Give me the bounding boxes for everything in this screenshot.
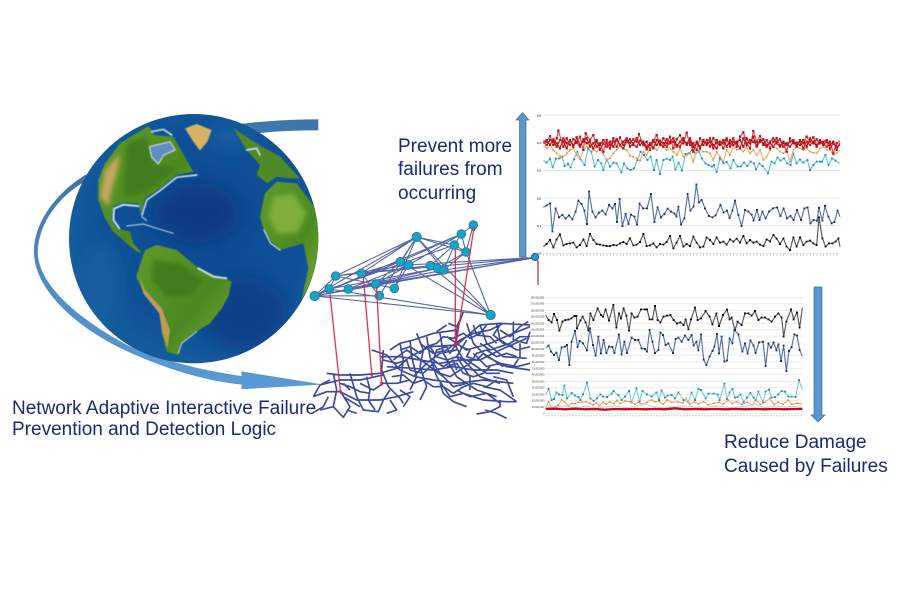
chart y-axis labels: 140,000,000 xyxy=(531,322,545,325)
chart y-axis labels: 30,000,000 xyxy=(532,393,545,396)
text: reduce damage: Caused by Failures xyxy=(724,456,888,477)
land: Greenland xyxy=(185,124,212,151)
arrow: downward blue arrow xyxy=(811,287,825,422)
arrow: upward blue arrow xyxy=(516,112,529,257)
chart y-axis labels: 0,4 xyxy=(537,141,541,145)
chart y-axis labels: 0,0 xyxy=(537,252,541,256)
series: black xyxy=(546,305,802,337)
land: Western North America tan xyxy=(100,153,120,207)
top chart: failure rate series xyxy=(537,113,840,256)
chart plotted series xyxy=(546,305,802,410)
chart y-axis labels: 0,1 xyxy=(537,224,541,228)
chart gridlines xyxy=(543,115,840,253)
chart y-axis labels: 130,000,000 xyxy=(531,329,545,332)
swoosh: left arc with arrowhead xyxy=(34,175,321,389)
chart y-axis labels: 0,2 xyxy=(537,196,541,200)
land: Hudson Bay xyxy=(149,142,175,164)
globe xyxy=(69,114,320,363)
land: Andes tan xyxy=(140,277,170,348)
text: network adaptive logic: Network Adaptive Interactive Failure xyxy=(12,398,316,419)
series: red two xyxy=(543,137,840,152)
text: prevent more failures: failures from xyxy=(398,159,503,180)
text: network adaptive logic: Prevention and Detection Logic xyxy=(12,419,276,440)
series: cyan xyxy=(546,380,802,402)
series: navy blue xyxy=(546,328,802,371)
connector: network node to chart xyxy=(532,254,538,285)
network graph and map xyxy=(310,221,537,418)
red link between charts xyxy=(537,260,539,285)
ocean shading xyxy=(80,123,287,350)
land: dark forest patches xyxy=(123,137,177,197)
chart y-axis labels: 0,3 xyxy=(537,169,541,173)
land: North America xyxy=(98,126,193,253)
series: navy blue xyxy=(543,184,840,231)
chart y-axis labels: 120,000,000 xyxy=(531,335,545,338)
text: reduce damage: Reduce Damage xyxy=(724,432,867,453)
chart y-axis labels: 110,000,000 xyxy=(531,342,545,345)
series: red three xyxy=(543,137,840,150)
chart y-axis labels: 50,000,000 xyxy=(532,380,545,383)
chart y-axis labels: 80,000,000 xyxy=(532,361,545,364)
swoosh arrow around globe xyxy=(34,119,321,389)
network: graph edges xyxy=(315,225,537,315)
land: Africa xyxy=(260,182,320,300)
network: nodes xyxy=(310,221,495,320)
series: pale blue xyxy=(546,404,802,408)
series: red one xyxy=(543,131,840,153)
chart y-axis labels: 100,000,000 xyxy=(531,348,545,351)
series: orange xyxy=(543,145,840,162)
text: prevent more failures: occurring xyxy=(398,183,476,204)
chart y-axis labels: 0 xyxy=(543,413,545,416)
swoosh: top right band xyxy=(240,119,318,133)
map: road network xyxy=(313,312,530,418)
land: Amazon dark area xyxy=(152,260,203,297)
chart y-axis labels: 160,000,000 xyxy=(531,309,545,312)
chart y-axis labels: 180,000,000 xyxy=(531,296,545,299)
chart y-axis labels: 60,000,000 xyxy=(532,374,545,377)
series: black xyxy=(543,217,840,250)
node at chart edge xyxy=(532,254,538,260)
chart y-axis labels: 0,5 xyxy=(537,113,541,117)
chart y-axis labels xyxy=(531,296,545,416)
chart y-axis labels: 90,000,000 xyxy=(532,354,545,357)
chart plotted series xyxy=(543,131,840,250)
chart y-axis labels: 20,000,000 xyxy=(532,400,545,403)
bottom chart: damage series xyxy=(531,296,802,416)
chart x-axis ticks xyxy=(546,414,802,418)
chart y-axis labels: 150,000,000 xyxy=(531,316,545,319)
series: red band xyxy=(546,408,802,410)
land: South America xyxy=(136,245,232,355)
land: Africa light patches xyxy=(268,193,307,233)
text: prevent more failures: Prevent more xyxy=(398,136,512,157)
series: cyan xyxy=(543,148,840,174)
chart y-axis labels: 70,000,000 xyxy=(532,367,545,370)
land: Europe xyxy=(233,128,300,183)
chart gridlines xyxy=(546,297,802,414)
land: coastal shelf highlights xyxy=(113,129,280,353)
chart y-axis labels xyxy=(537,113,541,256)
chart y-axis labels: 40,000,000 xyxy=(532,387,545,390)
red mapping arrows between graph and map xyxy=(330,227,474,394)
chart y-axis labels: 10,000,000 xyxy=(532,406,545,409)
chart x-axis ticks xyxy=(543,253,840,257)
series: orange xyxy=(546,398,802,408)
chart y-axis labels: 170,000,000 xyxy=(531,303,545,306)
